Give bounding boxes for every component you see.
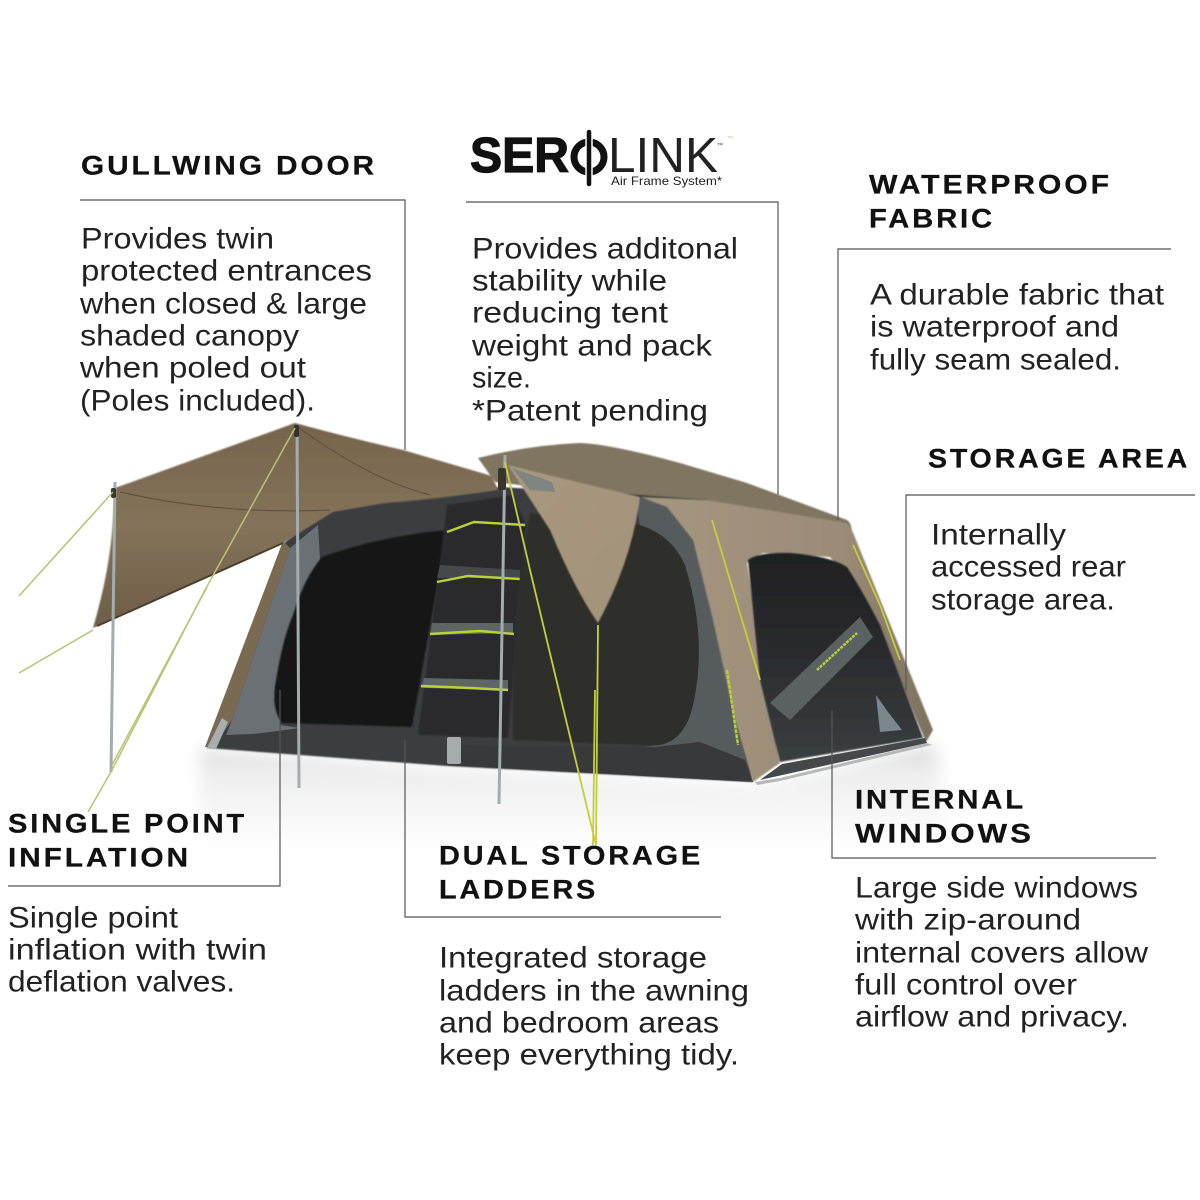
guy ropes: [19, 428, 900, 845]
text: windows description: airflow and privacy.: [855, 1000, 1129, 1033]
logo: serolink: ™: [717, 142, 723, 149]
text: windows description: full control over: [855, 968, 1077, 1001]
text: storage description: storage area.: [931, 583, 1115, 616]
right bedroom mesh window: [513, 513, 701, 746]
heading: gullwing door: GULLWING DOOR: [81, 151, 377, 181]
text: windows description: Large side windows: [855, 871, 1138, 904]
leader line: single point inflation: [8, 690, 280, 886]
storage ladder: [418, 495, 526, 738]
text: windows description: [854, 871, 1149, 1033]
text: waterproof description: is waterproof and: [870, 310, 1119, 343]
text: serolink description: [471, 232, 738, 427]
front tan flap: [508, 465, 640, 623]
side window skirt: [760, 738, 927, 780]
text: ladders description: ladders in the awning: [439, 974, 749, 1007]
brown awning canopy: [93, 423, 498, 628]
valve: [447, 737, 461, 764]
text: gullwing door description: (Poles included).: [80, 384, 315, 417]
panel: internal windows: [832, 710, 1156, 1033]
text: storage description: [931, 518, 1126, 616]
bottom skirt: [447, 742, 753, 781]
text: storage description: Internally: [931, 518, 1066, 551]
logo stripe on side: [727, 670, 738, 745]
text: gullwing door description: Provides twin: [81, 222, 274, 255]
heading: internal windows: [855, 785, 1034, 849]
leader line: storage area: [906, 495, 1195, 690]
panel: dual storage ladders: [405, 740, 749, 1071]
text: waterproof description: A durable fabric that: [870, 278, 1164, 311]
tent body: [207, 487, 753, 782]
text: gullwing door description: protected entrances: [81, 254, 372, 287]
text: ladders description: and bedroom areas: [439, 1006, 719, 1039]
panel: gullwing door: [79, 151, 405, 450]
tent dome roof: [478, 443, 851, 530]
text: gullwing door description: shaded canopy: [80, 319, 299, 352]
text: ladders description: keep everything tidy.: [439, 1038, 739, 1071]
base light strip: [755, 743, 932, 785]
left brown side edge: [205, 541, 290, 748]
heading: waterproof fabric: [869, 170, 1112, 234]
text: inflation description: inflation with twin: [8, 933, 267, 966]
text: storage description: accessed rear: [931, 550, 1126, 583]
left mesh window: [274, 530, 447, 727]
awning poles: [111, 425, 506, 804]
heading: internal windows: INTERNAL: [855, 785, 1026, 815]
heading: internal windows: WINDOWS: [855, 819, 1034, 849]
text: gullwing door description: when closed & large: [79, 287, 367, 320]
leader line: dual storage ladders: [405, 740, 721, 917]
leader line: serolink: [466, 202, 778, 495]
interior side window cover strap: [770, 617, 902, 732]
awning fold shadows: [97, 425, 430, 626]
text: inflation description: [8, 901, 267, 998]
text: gullwing door description: when poled out: [79, 351, 306, 384]
text: windows description: with zip-around: [854, 903, 1081, 936]
text: waterproof description: fully seam sealed.: [870, 343, 1121, 376]
text: serolink description: weight and pack: [471, 329, 712, 362]
heading: storage area: STORAGE AREA: [928, 444, 1190, 474]
text: inflation description: Single point: [8, 901, 178, 934]
logo: serolink: LINK: [608, 129, 718, 183]
heading: dual storage ladders: DUAL STORAGE: [439, 841, 703, 871]
side mesh window: [748, 553, 923, 762]
text: windows description: internal covers allow: [855, 936, 1149, 969]
text: waterproof description: [870, 278, 1164, 376]
heading: single point inflation: INFLATION: [8, 843, 191, 873]
text: inflation description: deflation valves.: [8, 965, 235, 998]
grey detail on flap: [512, 468, 555, 492]
text: ladders description: Integrated storage: [439, 941, 707, 974]
panel: serolink air frame system: [466, 129, 778, 495]
heading: single point inflation: SINGLE POINT: [8, 809, 247, 839]
text: serolink description: reducing tent: [472, 296, 668, 329]
text: ladders description: [439, 941, 749, 1071]
grey inner left panel: [225, 525, 320, 738]
logo: serolink: SER: [470, 129, 569, 183]
ground reflection: [200, 745, 950, 850]
heading: dual storage ladders: LADDERS: [439, 875, 598, 905]
panel: storage area: [906, 444, 1195, 690]
leader line: waterproof fabric: [838, 249, 1171, 520]
text: serolink description: stability while: [472, 264, 667, 297]
grey side trim: [600, 497, 752, 782]
tent illustration: [19, 423, 950, 850]
panel: single point inflation: [8, 690, 280, 998]
inflated corner tube: [207, 718, 228, 749]
logo: serolink: ™: [727, 135, 733, 142]
text: serolink description: *Patent pending: [472, 394, 708, 427]
tan side arch panel: [640, 497, 933, 782]
heading: dual storage ladders: [439, 841, 703, 905]
panel: waterproof fabric: [838, 170, 1171, 520]
logo: serolink: [470, 129, 733, 188]
bottom bathtub floor: [212, 728, 753, 782]
text: gullwing door description: [79, 222, 372, 417]
heading: waterproof fabric: WATERPROOF: [869, 170, 1112, 200]
heading: single point inflation: [8, 809, 247, 873]
leader line: gullwing door: [80, 200, 405, 450]
text: serolink description: size.: [472, 361, 531, 394]
leader line: internal windows: [832, 710, 1156, 858]
text: serolink description: Provides additonal: [472, 232, 738, 265]
heading: waterproof fabric: FABRIC: [869, 204, 995, 234]
logo: serolink: Air Frame System*: [611, 174, 722, 188]
